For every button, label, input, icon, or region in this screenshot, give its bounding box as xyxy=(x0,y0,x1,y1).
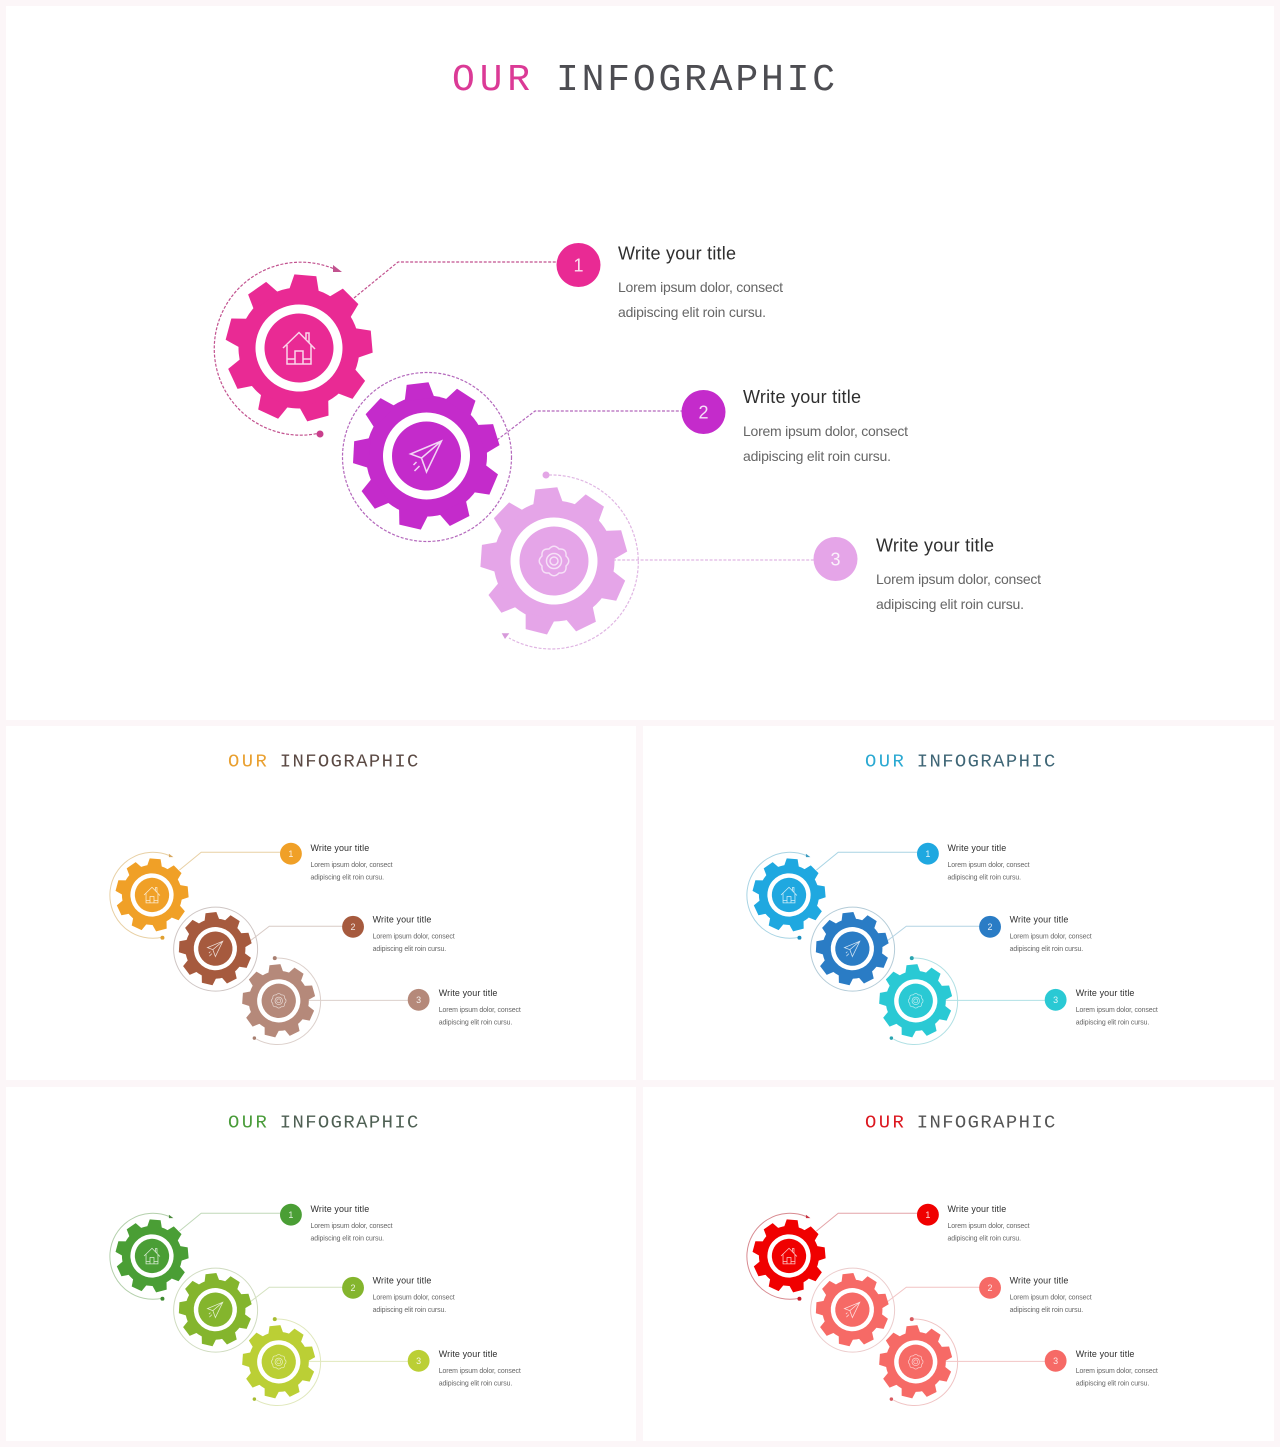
item 2 xyxy=(979,914,1092,953)
title: INFOGRAPHIC xyxy=(556,59,835,102)
item 3: 3 xyxy=(416,995,421,1005)
gear 2: paper plane xyxy=(334,363,682,549)
item 3 xyxy=(408,988,521,1027)
gear 1: home xyxy=(747,852,917,940)
item 3: Lorem ipsum dolor, consect xyxy=(1076,1368,1158,1375)
gear 2: paper plane xyxy=(807,903,979,995)
item 3 xyxy=(1045,1349,1158,1388)
item 1: adipiscing elit roin cursu. xyxy=(948,1236,1021,1243)
item 3: adipiscing elit roin cursu. xyxy=(439,1020,512,1027)
gear 1: home xyxy=(110,1213,280,1301)
item 1: Lorem ipsum dolor, consect xyxy=(948,862,1030,869)
item 2: 2 xyxy=(351,1283,356,1293)
panel: orange-brown variant xyxy=(6,726,636,1080)
item 2 xyxy=(342,1275,455,1314)
item 2: Lorem ipsum dolor, consect xyxy=(1010,1295,1092,1302)
item 1: adipiscing elit roin cursu. xyxy=(311,875,384,882)
item 1: Lorem ipsum dolor, consect xyxy=(311,1223,393,1230)
item 3 xyxy=(814,536,1041,612)
item 3 xyxy=(408,1349,521,1388)
item 1: 1 xyxy=(573,256,584,276)
item 3: Lorem ipsum dolor, consect xyxy=(876,571,1041,587)
item 3: 3 xyxy=(830,550,841,570)
item 1: 1 xyxy=(288,1210,293,1220)
title: OUR xyxy=(228,1112,267,1134)
gear 1: home xyxy=(110,852,280,940)
item 2: Lorem ipsum dolor, consect xyxy=(743,423,908,439)
item 2: Write your title xyxy=(1010,914,1068,924)
gear 3: cog xyxy=(233,955,408,1047)
item 2: 2 xyxy=(988,922,993,932)
item 3: adipiscing elit roin cursu. xyxy=(876,596,1024,612)
item 2: Lorem ipsum dolor, consect xyxy=(1010,934,1092,941)
item 1 xyxy=(280,843,393,882)
item 1 xyxy=(556,243,783,320)
panel: blue variant xyxy=(643,726,1274,1080)
item 1 xyxy=(280,1204,393,1243)
title: OUR xyxy=(228,751,267,773)
item 2: Write your title xyxy=(373,914,431,924)
gear 2: paper plane xyxy=(807,1264,979,1356)
item 1: adipiscing elit roin cursu. xyxy=(311,1236,384,1243)
item 3: Lorem ipsum dolor, consect xyxy=(1076,1007,1158,1014)
item 3: adipiscing elit roin cursu. xyxy=(1076,1020,1149,1027)
item 3: 3 xyxy=(1053,1356,1058,1366)
item 3: Write your title xyxy=(439,988,497,998)
item 3: Lorem ipsum dolor, consect xyxy=(439,1368,521,1375)
panel: main infographic (magenta) xyxy=(6,6,1274,720)
item 3: Write your title xyxy=(439,1349,497,1359)
gear 1: home xyxy=(747,1213,917,1301)
item 1: Lorem ipsum dolor, consect xyxy=(948,1223,1030,1230)
item 2 xyxy=(682,387,908,464)
item 3: 3 xyxy=(1053,995,1058,1005)
item 2 xyxy=(342,914,455,953)
item 2: adipiscing elit roin cursu. xyxy=(373,1307,446,1314)
item 1: 1 xyxy=(288,849,293,859)
item 1: 1 xyxy=(925,849,930,859)
title: INFOGRAPHIC xyxy=(917,751,1055,773)
item 2: Write your title xyxy=(1010,1275,1068,1285)
panel: green variant xyxy=(6,1087,636,1441)
title: OUR xyxy=(865,1112,904,1134)
item 1: Lorem ipsum dolor, consect xyxy=(311,862,393,869)
item 2: Lorem ipsum dolor, consect xyxy=(373,1295,455,1302)
gear 3: cog xyxy=(233,1316,408,1408)
item 2: 2 xyxy=(988,1283,993,1293)
item 3: Write your title xyxy=(1076,988,1134,998)
item 1: Write your title xyxy=(618,244,736,264)
item 3: Write your title xyxy=(876,536,994,556)
gear 3: cog xyxy=(870,1316,1045,1408)
item 1: 1 xyxy=(925,1210,930,1220)
item 2 xyxy=(979,1275,1092,1314)
gear 2: paper plane xyxy=(170,1264,342,1356)
title: INFOGRAPHIC xyxy=(280,751,418,773)
item 1: Write your title xyxy=(948,843,1006,853)
item 3: Lorem ipsum dolor, consect xyxy=(439,1007,521,1014)
item 1 xyxy=(917,1204,1030,1243)
gear 1: home xyxy=(214,262,557,438)
item 3: 3 xyxy=(416,1356,421,1366)
title: INFOGRAPHIC xyxy=(917,1112,1055,1134)
item 2: Write your title xyxy=(743,387,861,407)
item 3: Write your title xyxy=(1076,1349,1134,1359)
item 2: Write your title xyxy=(373,1275,431,1285)
item 2: adipiscing elit roin cursu. xyxy=(743,448,891,464)
item 1 xyxy=(917,843,1030,882)
item 3: adipiscing elit roin cursu. xyxy=(439,1381,512,1388)
item 2: Lorem ipsum dolor, consect xyxy=(373,934,455,941)
item 2: adipiscing elit roin cursu. xyxy=(373,946,446,953)
item 1: Write your title xyxy=(948,1204,1006,1214)
item 1: Write your title xyxy=(311,1204,369,1214)
item 2: 2 xyxy=(698,402,709,422)
title: INFOGRAPHIC xyxy=(280,1112,418,1134)
title: OUR xyxy=(865,751,904,773)
panel: red variant xyxy=(643,1087,1274,1441)
item 1: adipiscing elit roin cursu. xyxy=(618,304,766,320)
item 1: adipiscing elit roin cursu. xyxy=(948,875,1021,882)
item 2: adipiscing elit roin cursu. xyxy=(1010,946,1083,953)
item 3: adipiscing elit roin cursu. xyxy=(1076,1381,1149,1388)
title: OUR xyxy=(452,59,530,102)
gear 3: cog xyxy=(870,955,1045,1047)
item 3 xyxy=(1045,988,1158,1027)
item 1: Write your title xyxy=(311,843,369,853)
item 1: Lorem ipsum dolor, consect xyxy=(618,279,783,295)
item 2: adipiscing elit roin cursu. xyxy=(1010,1307,1083,1314)
gear 3: cog xyxy=(463,469,814,653)
gear 2: paper plane xyxy=(170,903,342,995)
item 2: 2 xyxy=(351,922,356,932)
